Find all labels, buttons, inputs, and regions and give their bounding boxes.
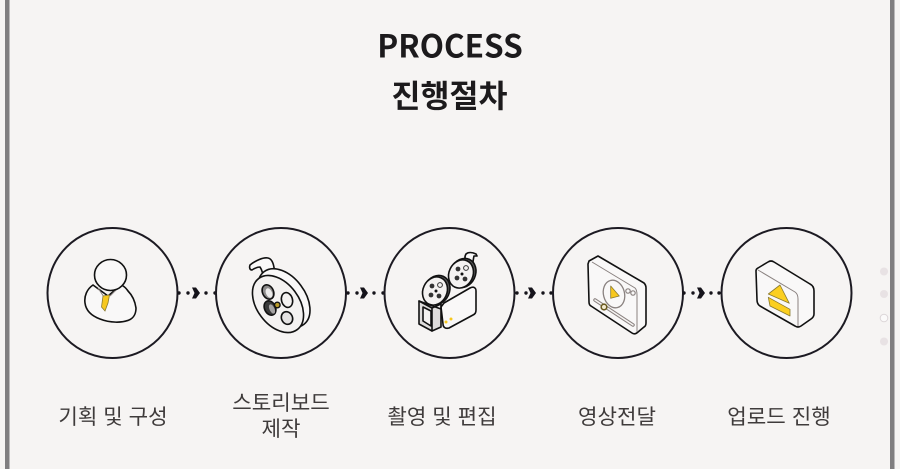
label: storyboard: 스토리보드: [232, 386, 330, 417]
pagination dots: [880, 268, 888, 346]
frame: right border: [890, 0, 894, 469]
title: [377, 22, 523, 117]
icon: upload button: [756, 261, 814, 327]
label: upload: 업로드 진행: [727, 400, 831, 431]
label: video delivery: 영상전달: [578, 400, 656, 431]
icon: movie camera: [418, 252, 481, 331]
arrow 2: [346, 288, 385, 298]
arrow 4: [682, 288, 721, 298]
label: planning: 기획 및 구성: [58, 400, 168, 431]
reel holes: [260, 283, 295, 326]
label: storyboard: [232, 386, 330, 443]
icon: person with tie: [85, 260, 136, 322]
step 5: upload circle: [722, 228, 852, 358]
icon: video player: [588, 256, 646, 334]
label: storyboard: 제작: [262, 412, 300, 443]
arrow 3: [515, 288, 553, 298]
step 4: delivery circle: [553, 228, 683, 358]
frame: left border: [5, 0, 10, 469]
title: 진행절차: [392, 71, 507, 117]
icon: film reel: [242, 258, 321, 342]
arrow 1: [177, 288, 217, 298]
label: filming and editing: 촬영 및 편집: [387, 400, 497, 431]
step 3: filming circle: [384, 228, 514, 358]
step 2: storyboard circle: [216, 228, 346, 358]
title: PROCESS: [377, 22, 523, 68]
step 1: planning circle: [48, 228, 178, 358]
